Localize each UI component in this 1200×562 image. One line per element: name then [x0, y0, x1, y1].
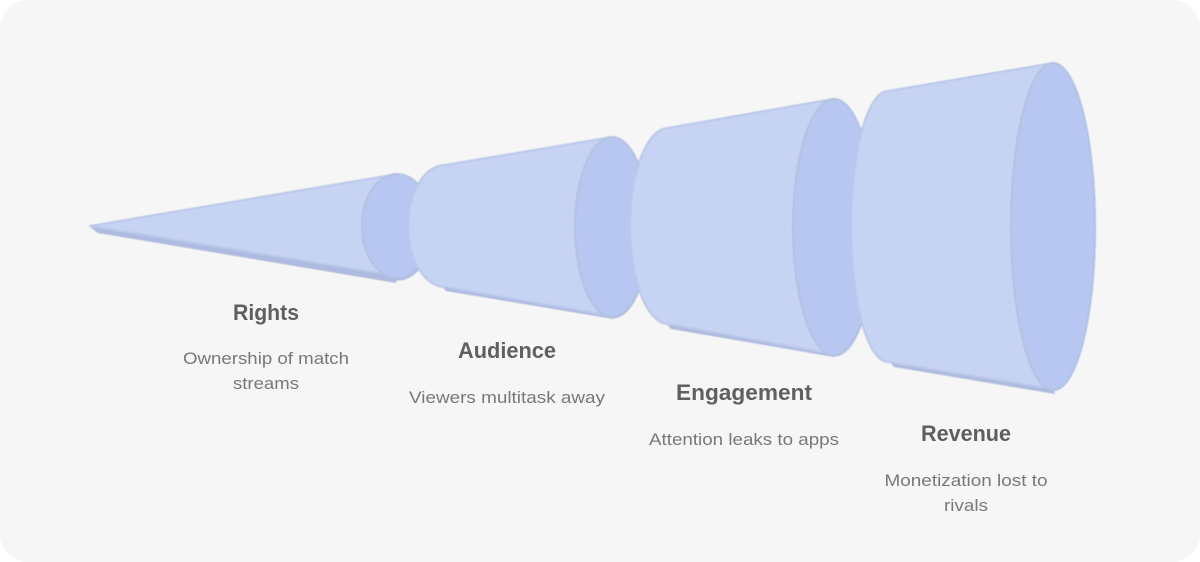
- label: rights: streams: [233, 374, 299, 393]
- label: audience: [409, 338, 606, 407]
- segment: engagement cone: [630, 99, 876, 357]
- funnel diagram: [90, 63, 1096, 394]
- label: engagement: Engagement: [676, 380, 813, 405]
- segment: revenue cone: [851, 63, 1096, 394]
- label: engagement: [649, 380, 839, 449]
- label: revenue: Revenue: [921, 421, 1011, 446]
- label: rights: Ownership of match: [183, 349, 349, 368]
- label: revenue: Monetization lost to: [884, 471, 1048, 490]
- label: audience: Audience: [458, 338, 556, 363]
- label: rights: Rights: [233, 300, 299, 325]
- label: revenue: rivals: [944, 496, 988, 515]
- label: rights: [183, 300, 349, 393]
- segment: audience cone: [408, 137, 650, 319]
- segment: rights cone: [90, 174, 433, 283]
- label: revenue: [884, 421, 1048, 515]
- label: audience: Viewers multitask away: [409, 388, 606, 407]
- label: engagement: Attention leaks to apps: [649, 430, 839, 449]
